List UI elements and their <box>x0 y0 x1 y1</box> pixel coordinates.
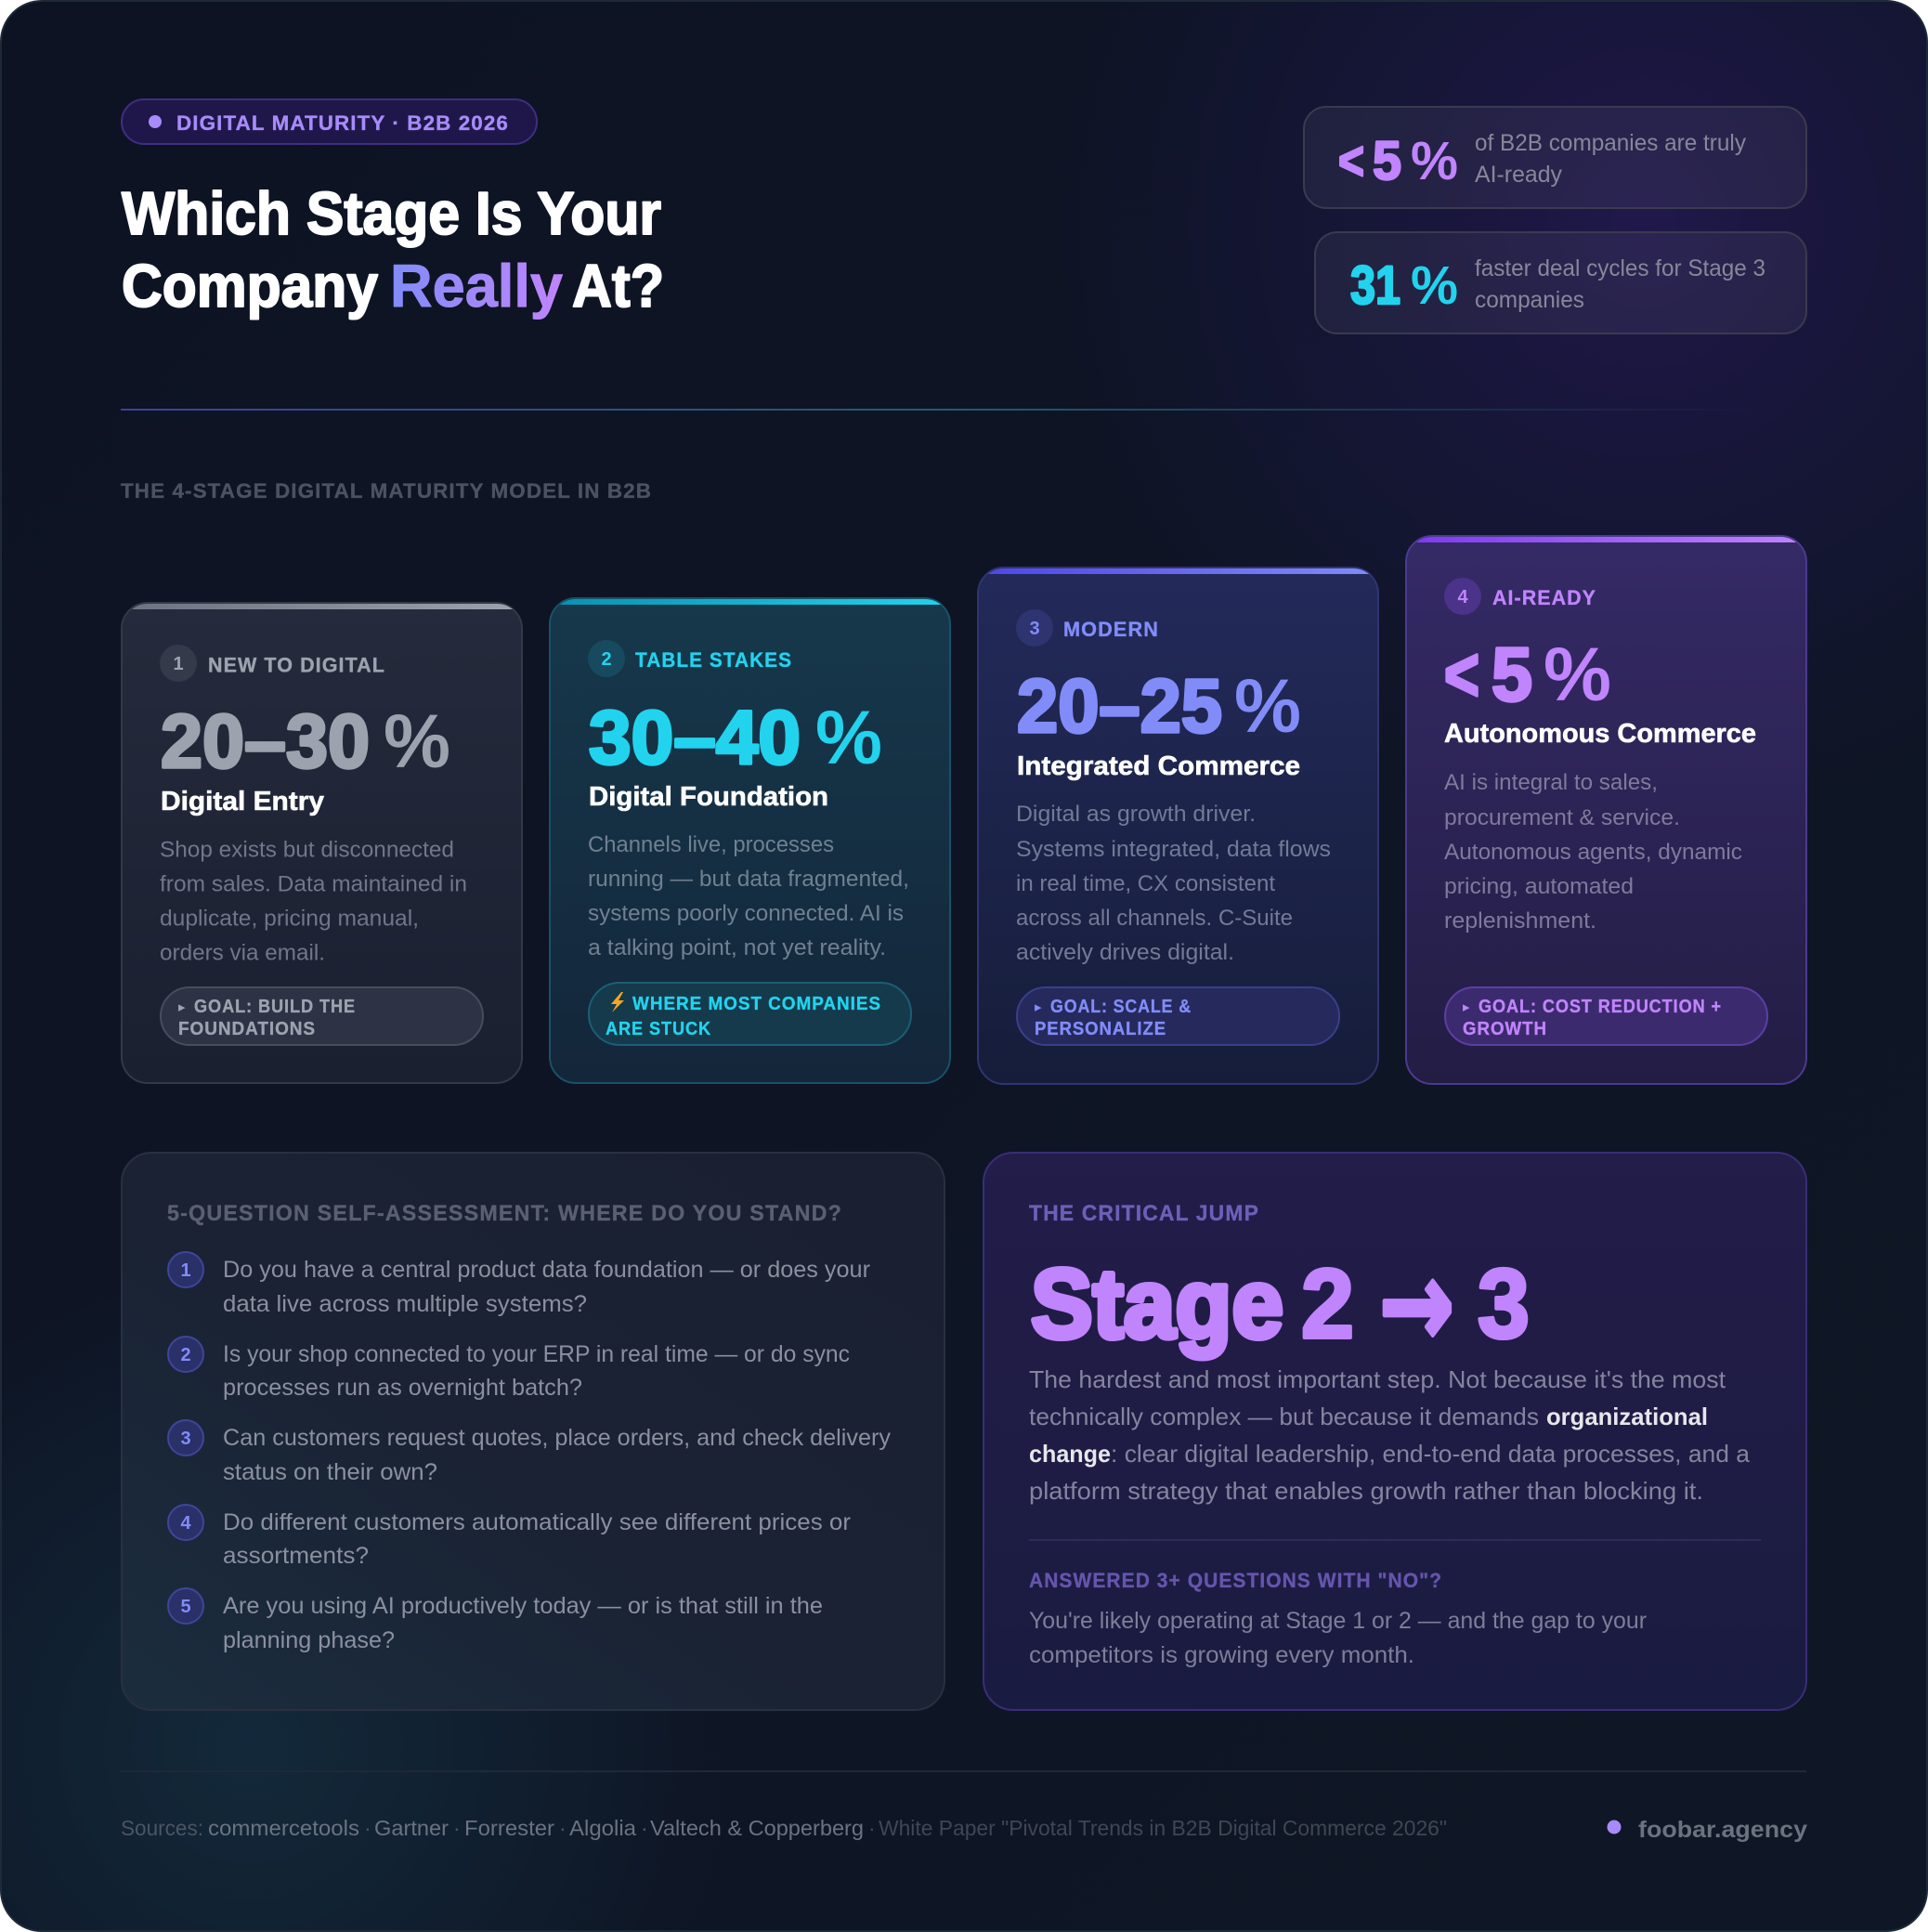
goal pill: GOAL: SCALE & <box>1050 997 1192 1017</box>
description: Channels live, processes <box>588 832 834 857</box>
share number: 20–25 <box>1017 664 1222 749</box>
share number: % <box>1544 633 1611 717</box>
explanation: technically complex — but because it demands <box>1029 1403 1539 1430</box>
question 4: Do different customers automatically see different prices or <box>223 1509 851 1535</box>
goal pill: GROWTH <box>1463 1019 1547 1039</box>
question 5: Are you using AI productively today — or is that still in the <box>223 1593 823 1619</box>
eyebrow pill <box>122 99 537 144</box>
stage label: 2 <box>601 649 612 670</box>
big headline <box>1031 1234 1530 1375</box>
description <box>1016 802 1331 965</box>
title <box>122 179 664 320</box>
stat card: under 5 percent: of B2B companies are truly <box>1475 130 1746 156</box>
footer sources: · <box>364 1816 371 1840</box>
footer sources: White Paper "Pivotal Trends in B2B Digital Commerce 2026" <box>879 1816 1447 1840</box>
explanation: change <box>1029 1440 1111 1468</box>
description: pricing, automated <box>1444 874 1634 899</box>
panel heading: 5-QUESTION SELF-ASSESSMENT: WHERE DO YOU STAND? <box>167 1201 842 1226</box>
footer sources: · <box>453 1816 461 1840</box>
title: Really <box>390 252 563 320</box>
stage label: NEW TO DIGITAL <box>208 654 385 676</box>
question 3: 3 <box>180 1429 191 1449</box>
description: actively drives digital. <box>1016 940 1234 965</box>
goal pill: ▸ <box>1035 999 1042 1015</box>
footer sources: · <box>559 1816 567 1840</box>
goal pill: FOUNDATIONS <box>178 1019 316 1039</box>
description: replenishment. <box>1444 908 1596 933</box>
stage label: 1 <box>173 654 184 674</box>
stage label <box>588 640 792 677</box>
eyebrow pill: DIGITAL MATURITY · B2B 2026 <box>176 111 509 135</box>
question 4: 4 <box>180 1513 191 1534</box>
stage title: Autonomous Commerce <box>1444 719 1756 749</box>
goal pill <box>1017 987 1339 1045</box>
stage label <box>1016 609 1159 646</box>
stat card: 31 percent: faster deal cycles for Stage 3 <box>1475 255 1765 281</box>
sub heading: ANSWERED 3+ QUESTIONS WITH "NO"? <box>1029 1569 1442 1592</box>
footer sources: commercetools <box>208 1816 359 1840</box>
description: Shop exists but disconnected <box>160 838 454 862</box>
goal pill <box>1445 987 1767 1045</box>
description: systems poorly connected. AI is <box>588 901 904 926</box>
description: from sales. Data maintained in <box>160 871 467 897</box>
stage label: 4 <box>1457 587 1468 607</box>
share number: 20–30 <box>161 699 370 784</box>
share number: % <box>815 696 882 780</box>
stage label: 3 <box>1029 619 1040 639</box>
conclusion <box>1029 1608 1647 1668</box>
goal pill: ▸ <box>178 999 186 1015</box>
explanation: platform strategy that enables growth rather than blocking it. <box>1029 1477 1703 1505</box>
question 2: Is your shop connected to your ERP in real time — or do sync <box>223 1341 850 1367</box>
panel: stage 3 modern <box>978 568 1378 1084</box>
big headline: → <box>1379 1234 1454 1375</box>
share number <box>1444 633 1611 717</box>
big headline: Stage <box>1031 1249 1283 1359</box>
description: in real time, CX consistent <box>1016 871 1275 896</box>
explanation: : clear digital leadership, end-to-end data processes, and a <box>1111 1440 1751 1468</box>
footer sources: Algolia <box>569 1816 636 1840</box>
stage title: Digital Entry <box>161 787 324 816</box>
stage title: Digital Foundation <box>589 782 828 812</box>
stage label <box>160 645 385 682</box>
question 4: assortments? <box>223 1543 369 1569</box>
callout pill <box>589 983 911 1045</box>
callout pill: WHERE MOST COMPANIES <box>632 994 881 1014</box>
description: Digital as growth driver. <box>1016 802 1256 827</box>
description: duplicate, pricing manual, <box>160 907 419 931</box>
description: AI is integral to sales, <box>1444 770 1658 795</box>
stat card: 31 percent: % <box>1411 255 1458 316</box>
callout pill: ARE STUCK <box>606 1019 711 1039</box>
question 1: 1 <box>180 1260 191 1281</box>
explanation <box>1029 1365 1751 1505</box>
description: Systems integrated, data flows <box>1016 837 1331 862</box>
big headline: 2 <box>1301 1249 1354 1359</box>
panel: stage 2 table stakes <box>550 598 950 1083</box>
title: Which Stage Is Your <box>122 179 661 247</box>
question 4 <box>168 1505 851 1569</box>
description <box>1444 770 1742 933</box>
stage label: AI-READY <box>1492 586 1596 609</box>
footer brand: foobar.agency <box>1638 1817 1807 1843</box>
description <box>160 838 467 966</box>
title: At? <box>572 252 664 320</box>
stage label: TABLE STAKES <box>635 648 792 672</box>
goal pill: PERSONALIZE <box>1035 1019 1166 1039</box>
panel heading: THE CRITICAL JUMP <box>1029 1201 1259 1226</box>
share number: 30–40 <box>589 696 801 780</box>
question 3: Can customers request quotes, place orders, and check delivery <box>223 1425 891 1451</box>
footer sources <box>121 1816 1447 1840</box>
stat card: under 5 percent: 5 <box>1373 131 1401 191</box>
description <box>588 832 909 960</box>
goal pill: GOAL: COST REDUCTION + <box>1479 997 1722 1017</box>
goal pill: ▸ <box>1463 999 1470 1015</box>
question 3: status on their own? <box>223 1459 437 1485</box>
question 1 <box>168 1252 870 1317</box>
question 2: 2 <box>180 1345 191 1365</box>
footer sources: Forrester <box>464 1816 554 1840</box>
goal pill <box>161 987 483 1045</box>
goal pill: GOAL: BUILD THE <box>194 997 356 1017</box>
conclusion: You're likely operating at Stage 1 or 2 — and the gap to your <box>1029 1608 1647 1634</box>
question 2 <box>168 1337 850 1401</box>
description: orders via email. <box>160 940 325 966</box>
description: across all channels. C-Suite <box>1016 906 1293 931</box>
panel: stage 4 ai-ready <box>1406 536 1806 1084</box>
stat card: under 5 percent: < <box>1338 131 1364 191</box>
explanation: The hardest and most important step. Not because it's the most <box>1029 1365 1726 1393</box>
stat card: under 5 percent <box>1304 107 1806 208</box>
stat card: 31 percent: companies <box>1475 287 1584 313</box>
panel: stage 1 new to digital <box>122 603 522 1083</box>
description: a talking point, not yet reality. <box>588 935 886 960</box>
stat card: under 5 percent: AI-ready <box>1475 162 1562 188</box>
footer sources: Sources: <box>121 1816 203 1840</box>
stat card: under 5 percent: % <box>1411 131 1458 191</box>
footer sources: Valtech & Copperberg <box>650 1816 864 1840</box>
big headline: 3 <box>1478 1249 1530 1359</box>
conclusion: competitors is growing every month. <box>1029 1642 1414 1668</box>
title: Company <box>122 252 378 320</box>
footer sources: · <box>868 1816 876 1840</box>
share number: % <box>384 699 450 784</box>
question 5: 5 <box>180 1597 191 1617</box>
stage label: MODERN <box>1063 618 1159 641</box>
question 2: processes run as overnight batch? <box>223 1375 582 1401</box>
stage label <box>1444 578 1596 615</box>
question 1: Do you have a central product data foundation — or does your <box>223 1257 870 1283</box>
stage title: Integrated Commerce <box>1017 751 1300 781</box>
question 3 <box>168 1420 891 1485</box>
section heading: THE 4-STAGE DIGITAL MATURITY MODEL IN B2B <box>121 479 652 503</box>
footer sources: · <box>641 1816 648 1840</box>
stat card: 31 percent <box>1315 232 1806 333</box>
share number: % <box>1234 664 1301 749</box>
explanation: organizational <box>1546 1403 1708 1430</box>
question 1: data live across multiple systems? <box>223 1291 587 1317</box>
stat card: 31 percent: 31 <box>1350 255 1400 316</box>
description: procurement & service. <box>1444 805 1680 830</box>
share number: < <box>1444 633 1479 717</box>
question 5 <box>168 1588 823 1653</box>
panel: the critical jump <box>984 1153 1806 1710</box>
description: Autonomous agents, dynamic <box>1444 840 1742 865</box>
footer sources: Gartner <box>374 1816 449 1840</box>
share number: 5 <box>1492 633 1532 717</box>
panel: self-assessment <box>122 1153 944 1710</box>
question 5: planning phase? <box>223 1627 395 1653</box>
description: running — but data fragmented, <box>588 867 909 892</box>
